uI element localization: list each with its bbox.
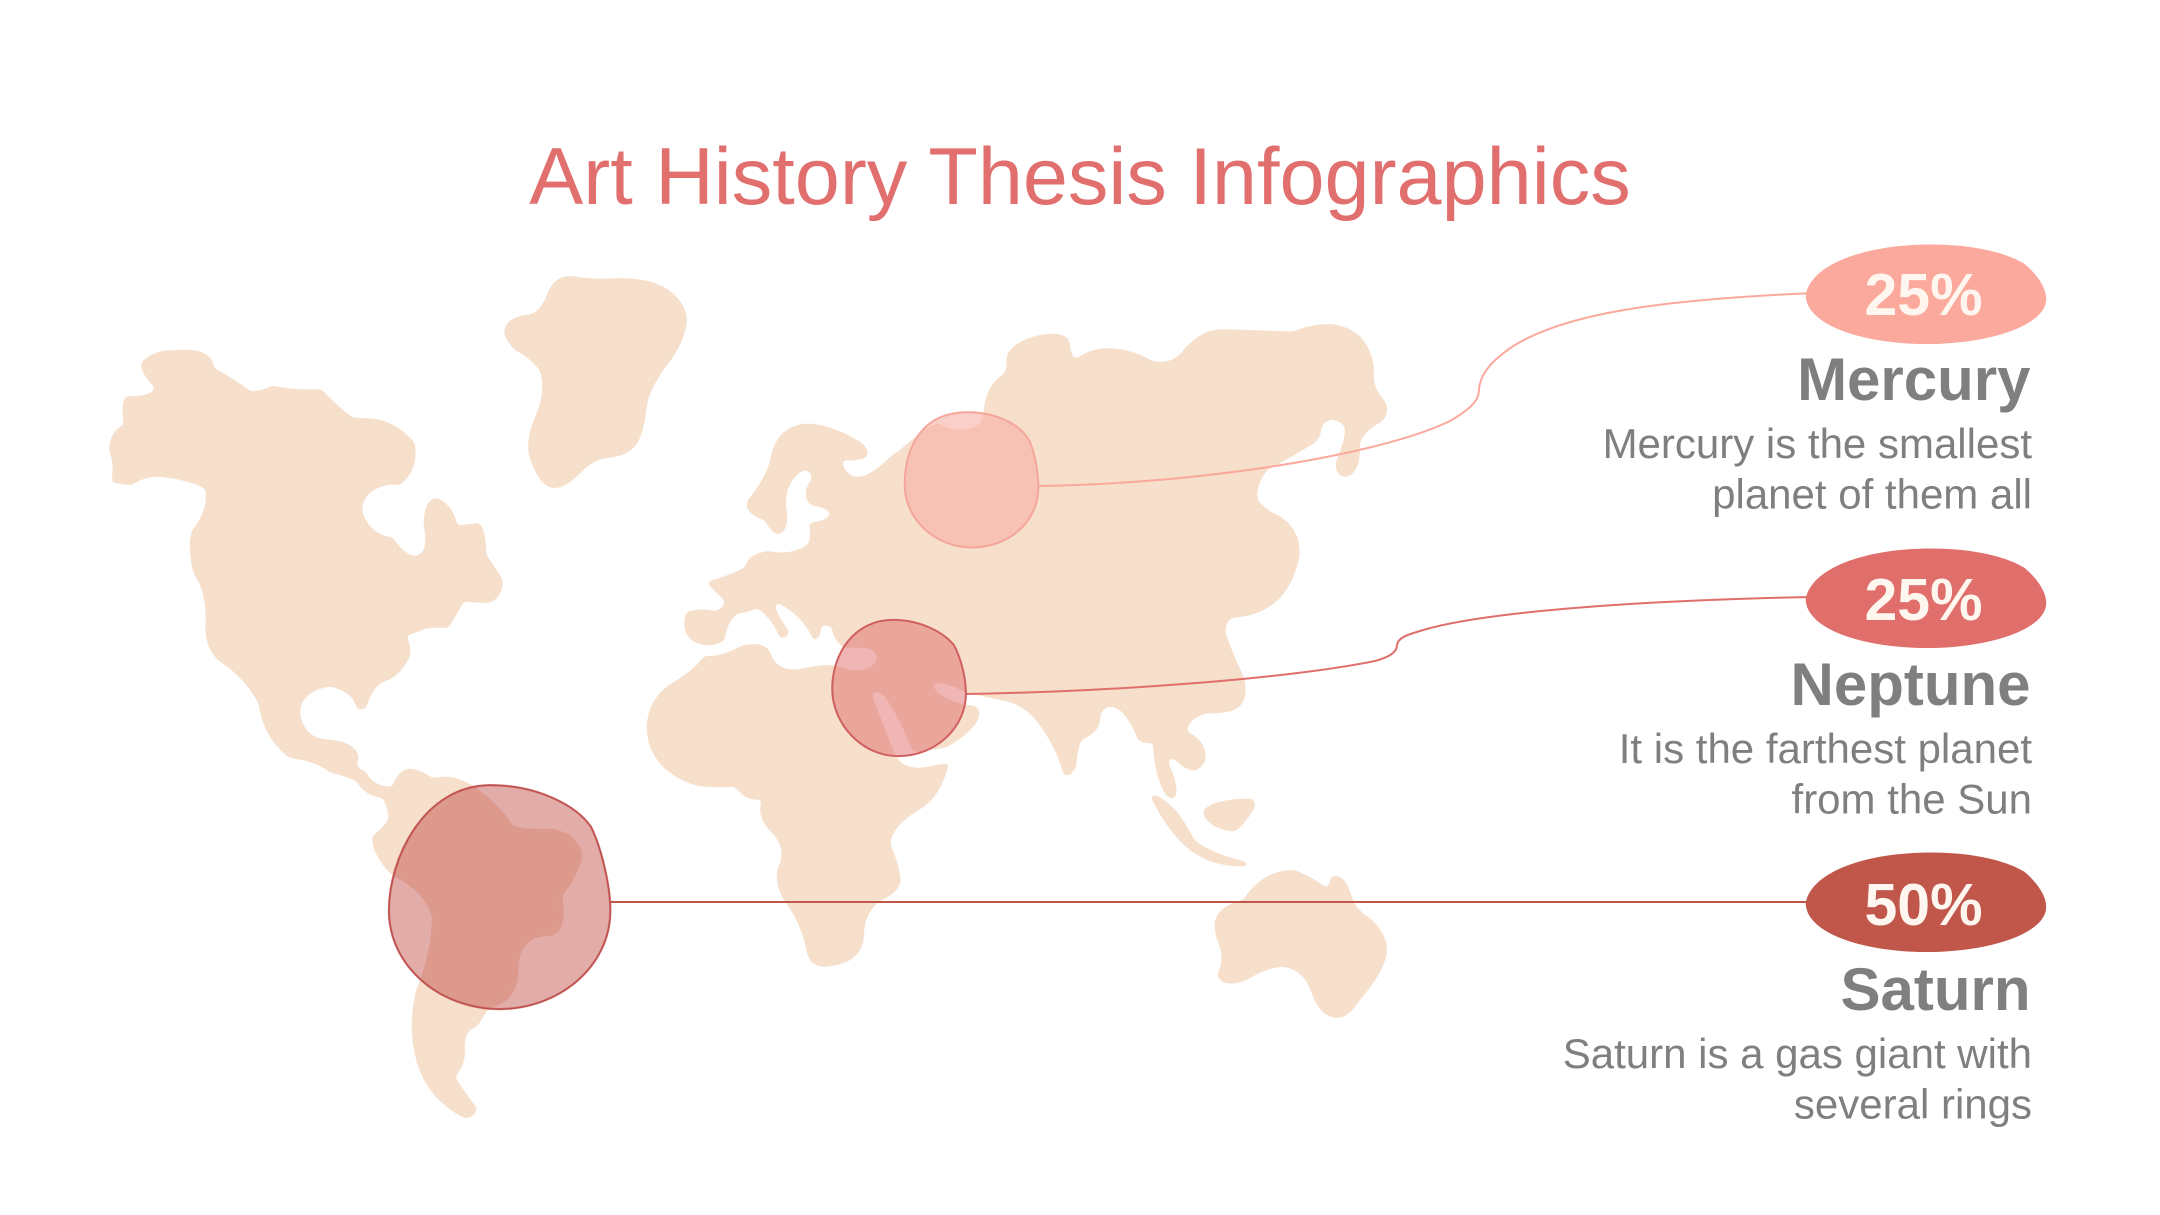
map: Borneo — [1203, 798, 1255, 832]
marker: Neptune — [832, 620, 966, 756]
description: Neptune: from the Sun — [1792, 776, 2032, 822]
item: Saturn — [1563, 853, 2046, 1128]
value: 25%: 25% — [1864, 262, 1983, 328]
map: Australia — [1214, 870, 1387, 1018]
pill: Saturn 50% — [1806, 853, 2046, 952]
connector: Saturn — [610, 901, 1815, 903]
connector: Neptune — [966, 597, 1815, 694]
map: Sumatra — [1150, 795, 1249, 866]
marker: Saturn — [389, 785, 610, 1009]
marker: Mercury — [905, 412, 1038, 547]
title: Art History Thesis Infographics — [529, 132, 1631, 222]
map: Greenland — [504, 276, 687, 488]
heading: Saturn: Saturn — [1840, 956, 2030, 1023]
description: Mercury: planet of them all — [1712, 470, 2032, 518]
value: 50%: 50% — [1864, 872, 1983, 938]
value: 25%: 25% — [1864, 567, 1983, 633]
pill: Neptune 25% — [1806, 549, 2046, 648]
connector: Mercury — [1038, 293, 1815, 486]
description: Neptune: It is the farthest planet — [1619, 725, 2032, 772]
map: Eurasia and Africa — [647, 324, 1387, 967]
item: Neptune — [1619, 549, 2046, 822]
map: Americas — [109, 350, 582, 1119]
pill: Mercury 25% — [1806, 245, 2046, 344]
description: Mercury: Mercury is the smallest — [1603, 420, 2032, 467]
item: Mercury — [1603, 245, 2046, 518]
heading: Neptune: Neptune — [1790, 651, 2030, 718]
description: Saturn: Saturn is a gas giant with — [1563, 1030, 2032, 1077]
heading: Mercury: Mercury — [1797, 346, 2031, 413]
description: Saturn: several rings — [1794, 1080, 2032, 1128]
world map — [109, 276, 1387, 1119]
